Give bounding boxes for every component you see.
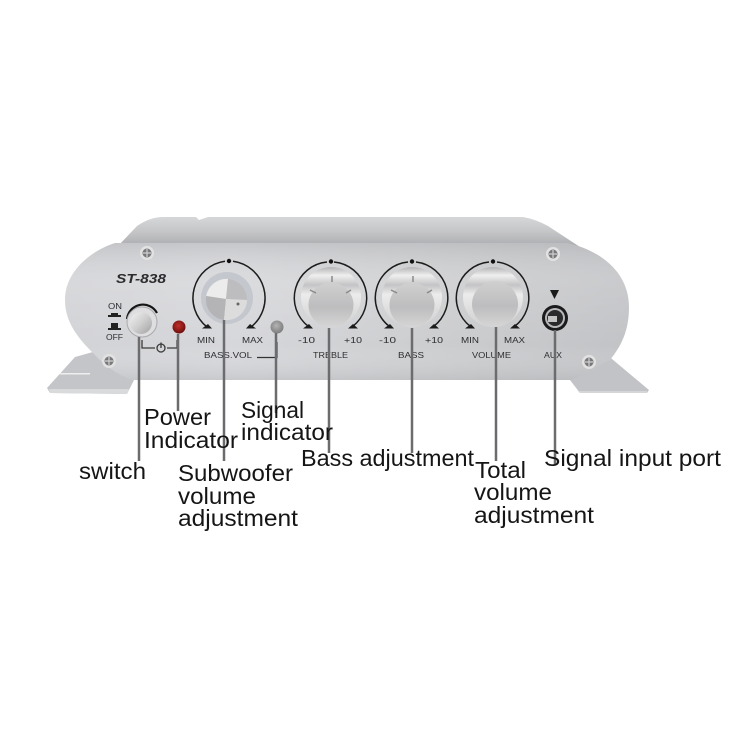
- model label: ST-838: [116, 271, 167, 286]
- panel labels: MIN: [461, 335, 479, 345]
- panel labels: [197, 335, 562, 360]
- label: signal input port: Signal input port: [544, 445, 721, 471]
- label: subwoofer volume adjustment: [178, 460, 298, 531]
- label: signal indicator: indicator: [241, 419, 333, 445]
- power symbol bracket: [142, 340, 177, 352]
- screw: bottom left: [102, 354, 116, 368]
- signal bracket: [257, 342, 277, 358]
- switch labels: OFF: [106, 332, 123, 342]
- bass knob: [375, 259, 448, 328]
- panel labels: +10: [344, 335, 362, 345]
- amplifier device: [47, 217, 649, 394]
- volume knob: [456, 259, 529, 328]
- power switch: [127, 305, 157, 337]
- panel labels: MIN: [197, 335, 215, 345]
- panel labels: BASS.VOL: [204, 350, 252, 360]
- label: total volume adjustment: adjustment: [474, 502, 594, 528]
- panel labels: BASS: [398, 350, 424, 360]
- label: signal indicator: Signal: [241, 397, 304, 423]
- subwoofer volume knob: [193, 259, 265, 328]
- power indicator led: [172, 320, 186, 334]
- front panel: [65, 243, 629, 380]
- aux jack: [542, 305, 568, 331]
- switch labels: ON: [108, 301, 122, 311]
- label: total volume adjustment: volume: [474, 479, 552, 505]
- label: subwoofer volume adjustment: volume: [178, 483, 256, 509]
- aux arrow: [550, 290, 559, 299]
- signal indicator led: [270, 320, 284, 334]
- label: total volume adjustment: Total: [475, 457, 526, 483]
- switch labels: [106, 301, 123, 342]
- label: signal indicator: [241, 397, 333, 445]
- leader lines: [139, 320, 555, 464]
- label: total volume adjustment: [474, 457, 594, 528]
- panel labels: -10: [379, 335, 396, 345]
- label: switch: switch: [79, 458, 146, 484]
- treble knob: [294, 259, 367, 328]
- label: subwoofer volume adjustment: adjustment: [178, 505, 298, 531]
- top of casing: [118, 217, 580, 247]
- label: power indicator: Indicator: [144, 427, 238, 453]
- panel labels: TREBLE: [313, 350, 348, 360]
- panel labels: +10: [425, 335, 443, 345]
- screw: top right: [546, 247, 560, 261]
- screw: top left: [140, 246, 154, 260]
- screw: bottom right: [582, 355, 596, 369]
- mounting foot: right: [570, 352, 649, 393]
- mounting foot: left: [47, 350, 134, 394]
- panel labels: AUX: [544, 350, 562, 360]
- label: subwoofer volume adjustment: Subwoofer: [178, 460, 293, 486]
- label: bass adjustment: Bass adjustment: [301, 445, 474, 471]
- label: power indicator: Power: [144, 404, 211, 430]
- label: power indicator: [144, 404, 238, 453]
- panel labels: VOLUME: [472, 350, 511, 360]
- panel labels: MAX: [242, 335, 263, 345]
- panel labels: -10: [298, 335, 315, 345]
- panel labels: MAX: [504, 335, 525, 345]
